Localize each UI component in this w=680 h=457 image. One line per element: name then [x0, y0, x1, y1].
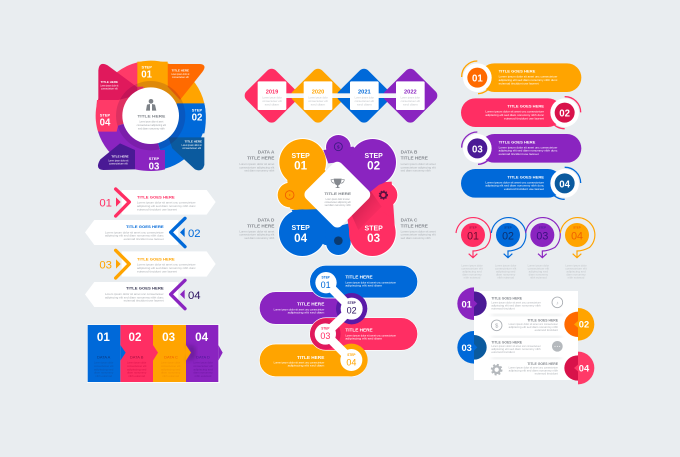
- bar 01: [462, 61, 581, 94]
- step 03 circle: nibh euismod: [530, 277, 548, 279]
- row 01: adipiscing elit sed diam nonummy nibh dunc: [137, 205, 197, 208]
- row 03: euismod tincidunt use laoreet: [137, 270, 177, 273]
- pill texts: TITLE HERE: [345, 328, 373, 333]
- column C: 03: [162, 331, 176, 344]
- row 02: 02: [188, 228, 201, 240]
- row 4 text: euismod tincidunt: [535, 373, 558, 376]
- label: data A: Lorem ipsum dolor sit amet: [239, 163, 275, 166]
- step 04 circle: STEP: [573, 226, 581, 230]
- arrow: dark purple: [98, 143, 135, 170]
- step 04 circle: adipiscing sed: [566, 271, 587, 273]
- diamond 2020: [289, 66, 347, 125]
- arrow: dark blue: [168, 137, 204, 170]
- card 2022: consectetuer elit: [401, 100, 420, 103]
- pill texts: Lorem ipsum dolor sit amet unc consectetuer: [274, 308, 325, 311]
- label: data B: TITLE HERE: [401, 156, 428, 161]
- column B: consectetuer elit: [127, 365, 147, 368]
- pill texts: adipiscing elit sed diam: [288, 365, 324, 368]
- label: data C: DATA C: [401, 218, 418, 223]
- icon: gear: [379, 191, 387, 199]
- bar 01: Lorem ipsum dolor sit amet unc consectetuer: [499, 76, 558, 79]
- row 2 text: TITLE GOES HERE: [527, 318, 559, 322]
- diamond 2019: [242, 66, 301, 125]
- label: data B: Lorem ipsum dolor sit amet: [401, 163, 436, 166]
- step 02 circle: diam nonummy: [496, 274, 516, 276]
- center circle: consectetuer adipiscing elit: [137, 124, 166, 127]
- arrow labels: consectetuer elit: [172, 76, 189, 79]
- row 2 text: [509, 318, 559, 332]
- panel: rounded bars with number badges: [461, 61, 581, 199]
- row 4 text: [509, 362, 559, 376]
- label: data D: TITLE HERE: [247, 224, 274, 229]
- step 03 block: 03: [149, 161, 160, 172]
- bar 02: 02: [559, 109, 570, 120]
- step 01 circle: [456, 218, 491, 279]
- step 04: [346, 353, 356, 367]
- row 02: Lorem ipsum dolor sit amet unc consectetuer: [105, 231, 164, 234]
- pill texts: adipiscing elit sed diam: [288, 311, 324, 314]
- step 02 circle: adipiscing sed: [496, 271, 516, 273]
- step 04 circle: diam nonummy: [566, 274, 587, 276]
- panel: four colored data columns: [87, 324, 223, 383]
- badge 04: 04: [579, 363, 590, 373]
- label: data C: TITLE HERE: [401, 224, 428, 229]
- bar 02: Lorem ipsum dolor sit amet unc consectetuer: [485, 111, 544, 114]
- badge 03: 03: [461, 343, 472, 353]
- arrow labels: TITLE HERE: [185, 140, 202, 143]
- row 4 text: adipiscing elit sed diam nonummy nibh: [509, 370, 559, 373]
- label: data B: [401, 150, 436, 173]
- label: data D: sed diam nonummy nibh: [244, 238, 275, 240]
- step labels: 01: [294, 160, 308, 173]
- row 4 text: Lorem ipsum dolor sit amet unc consectetuer: [509, 367, 558, 370]
- step 04 circle: nibh euismod: [568, 277, 585, 279]
- badge 01: 01: [461, 299, 472, 309]
- card 2019: 2019: [266, 89, 278, 95]
- column C: [153, 325, 195, 382]
- column D: 04: [195, 331, 209, 344]
- step 03: 03: [320, 331, 330, 341]
- step 02 circle: STEP: [504, 226, 512, 230]
- row 1 text: euismod tincidunt: [491, 307, 515, 310]
- card 2021: [350, 81, 379, 110]
- column B: DATA B: [130, 355, 144, 360]
- column B: [120, 325, 158, 382]
- step 02: 02: [347, 305, 357, 315]
- bar 03: euismod tincidunt use laoreet: [499, 153, 539, 156]
- column C: adipiscing sed: [161, 369, 181, 371]
- step labels: STEP: [365, 153, 383, 160]
- column A: consectetuer elit: [94, 365, 114, 368]
- label: data D: [239, 218, 275, 240]
- pill texts: Lorem ipsum dolor sit amet unc consectetuer: [345, 334, 396, 337]
- row 03: Lorem ipsum dolor sit amet unc consectetuer: [137, 264, 196, 267]
- column A: DATA A: [97, 355, 111, 360]
- row 1 text: TITLE GOES HERE: [491, 297, 523, 301]
- column B: 02: [129, 331, 142, 344]
- pill yellow: [259, 344, 367, 377]
- icon: music: ♪: [556, 300, 559, 306]
- row 2 text: Lorem ipsum dolor sit amet unc consectetuer: [509, 323, 558, 326]
- center diamond: [302, 159, 373, 230]
- row 04: 04: [188, 290, 201, 302]
- card 2020: consectetuer elit: [308, 100, 328, 103]
- orange circle: [279, 139, 326, 186]
- step 02 block: STEP: [192, 107, 203, 112]
- bar 04: euismod tincidunt use laoreet: [504, 188, 544, 191]
- step 02: STEP: [348, 301, 356, 305]
- bar 03: TITLE GOES HERE: [499, 139, 536, 144]
- card 2022: [396, 81, 425, 110]
- step 04 block: [96, 100, 122, 132]
- column A: [88, 325, 126, 382]
- step 03 block: STEP: [149, 156, 160, 161]
- arrow labels: Lorem ipsum dolor sit: [171, 73, 190, 76]
- step 03 circle: adipiscing sed: [529, 271, 549, 273]
- row 1 text: Lorem ipsum dolor sit amet unc consectetuer: [491, 301, 541, 304]
- bar 01: euismod tincidunt use laoreet: [499, 82, 539, 85]
- row 3 text: [491, 340, 542, 354]
- badge 02: 02: [579, 320, 589, 330]
- pill texts: TITLE HERE: [345, 275, 373, 280]
- column A: adipiscing sed: [94, 369, 114, 371]
- label: data C: Lorem ipsum dolor sit amet: [401, 230, 436, 233]
- step 02 circle: [491, 218, 526, 279]
- step labels: [292, 153, 383, 245]
- center diamond: consectetuer adipiscing elit: [325, 201, 351, 204]
- step 02 block: [177, 103, 206, 133]
- bar 02: [461, 97, 581, 129]
- ring: step 02: [336, 293, 367, 324]
- bar 01: TITLE GOES HERE: [499, 69, 536, 74]
- center circle: Lorem ipsum dolor sit amet: [139, 121, 164, 124]
- bar 04: Lorem ipsum dolor sit amet unc consectetuer: [485, 181, 544, 184]
- step 02 block: 02: [192, 112, 202, 123]
- row 02: [85, 218, 201, 247]
- step 01 circle: nibh euismod: [464, 277, 481, 279]
- bar 02: TITLE GOES HERE: [507, 104, 544, 109]
- column A: Lorem ipsum dolor: [94, 362, 114, 365]
- column D: diam nonummy: [193, 373, 214, 375]
- icon: chat: [552, 341, 563, 352]
- step 03 circle: Lorem ipsum dolor: [528, 264, 549, 267]
- step 01: [321, 276, 331, 290]
- column B: Lorem ipsum dolor: [127, 362, 147, 365]
- column B: adipiscing sed: [127, 369, 147, 371]
- row 03: 03: [99, 259, 112, 271]
- bar 04: [461, 167, 581, 199]
- step 02 circle: Lorem ipsum dolor: [495, 264, 517, 267]
- column C: Lorem ipsum dolor: [161, 362, 181, 365]
- pill texts: TITLE HERE: [297, 302, 324, 307]
- step 01 circle: consectetuer elit: [461, 267, 483, 270]
- arrow labels: TITLE HERE: [172, 69, 189, 72]
- panel: clover four steps: [239, 134, 436, 257]
- label: data D: Lorem ipsum dolor sit amet: [239, 230, 275, 233]
- purple shape: [323, 135, 396, 193]
- arrow labels: Lorem ipsum dolor sit: [182, 144, 202, 147]
- white connector: [315, 272, 363, 371]
- row 04: TITLE GOES HERE: [126, 287, 164, 291]
- step 04: 04: [346, 357, 356, 367]
- step 03: [320, 327, 330, 341]
- step 03 block: [135, 150, 165, 172]
- card 2020: sed diam: [311, 104, 325, 106]
- diamond 2022: [381, 66, 440, 125]
- center diamond: Lorem ipsum dolor sit amet: [326, 198, 350, 201]
- row 04: euismod tincidunt use laoreet: [124, 300, 164, 303]
- panel: timeline diamonds: [242, 66, 440, 125]
- step 01: STEP: [322, 276, 330, 280]
- icon: dollar: $: [337, 144, 340, 149]
- column A: diam nonummy: [94, 373, 114, 375]
- step 03 circle: consectetuer elit: [528, 267, 549, 270]
- step 03 circle: STEP: [539, 226, 546, 230]
- arrow labels: TITLE HERE: [111, 156, 129, 159]
- arrow: orange: [168, 64, 205, 100]
- row 3 text: Lorem ipsum dolor sit amet unc consectetuer: [491, 345, 541, 348]
- pill texts: [274, 275, 396, 368]
- card 2020: [304, 81, 332, 110]
- card 2021: Lorem ipsum dolor: [355, 97, 374, 100]
- step 02 circle: nibh euismod: [497, 277, 515, 279]
- label: data A: sed diam nonummy nibh: [244, 171, 275, 173]
- row 02: TITLE GOES HERE: [126, 225, 164, 229]
- step 01 block: 01: [141, 70, 153, 81]
- card 2019: Lorem ipsum dolor: [262, 97, 282, 100]
- step 03 circle: [526, 218, 560, 279]
- label: data C: sed diam nonummy nibh: [401, 238, 431, 240]
- card 2019: sed diam: [265, 104, 279, 106]
- center diamond: sed diam nonummy nibh: [325, 205, 351, 207]
- label: data A: DATA A: [258, 150, 275, 155]
- arrow labels: TITLE HERE: [101, 81, 118, 84]
- label: data B: sed diam nonummy nibh: [401, 171, 431, 173]
- panel: circular steps with down arrows: [456, 218, 595, 279]
- pill texts: Lorem ipsum dolor sit amet unc consectetuer: [345, 281, 396, 284]
- card 2021: 2021: [358, 89, 371, 95]
- row 01: 01: [99, 197, 112, 209]
- step 01 circle: adipiscing sed: [462, 271, 483, 273]
- label: data D: consectetuer adipiscing elit: [239, 234, 275, 237]
- icon: dollar: $: [495, 323, 499, 329]
- diamond 2021: [335, 66, 393, 125]
- step 01 circle: diam nonummy: [462, 274, 483, 276]
- row 03: TITLE GOES HERE: [137, 257, 175, 261]
- step 03 circle: diam nonummy: [529, 274, 549, 276]
- row 04: [85, 280, 201, 309]
- step labels: STEP: [292, 225, 310, 232]
- panel: white card list with half circles: [457, 287, 594, 384]
- arrow labels: [100, 69, 202, 165]
- column A: nibh euismod: [95, 376, 113, 378]
- step 04 circle: Lorem ipsum dolor: [565, 264, 587, 267]
- bar 04: TITLE GOES HERE: [507, 174, 544, 179]
- label: data B: DATA B: [401, 150, 418, 155]
- arrow labels: consectetuer elit: [101, 88, 118, 91]
- column B: diam nonummy: [127, 373, 147, 375]
- row 3 text: euismod tincidunt: [491, 351, 515, 354]
- column D: nibh euismod: [195, 376, 212, 378]
- card 2022: Lorem ipsum dolor: [401, 97, 420, 100]
- card 2022: 2022: [404, 89, 417, 95]
- label: data C: consectetuer adipiscing elit: [401, 234, 436, 237]
- row 2 text: adipiscing elit sed diam nonummy nibh: [509, 326, 559, 329]
- column D: Lorem ipsum dolor: [193, 362, 213, 365]
- row 3 text: TITLE GOES HERE: [491, 340, 523, 344]
- pill texts: adipiscing elit sed diam: [345, 337, 382, 340]
- bar 04: 04: [559, 179, 571, 190]
- pill purple: [259, 292, 367, 324]
- card 2020: Lorem ipsum dolor: [308, 97, 328, 100]
- row 3 text: adipiscing elit sed diam nonummy nibh: [491, 348, 542, 351]
- icon: target: [285, 191, 294, 199]
- label: data C: [401, 218, 436, 240]
- bar 04: adipiscing elit sed diam nonummy nibh dunc: [485, 185, 545, 188]
- arrow labels: consectetuer elit: [182, 147, 201, 150]
- step 04 circle: [560, 218, 595, 279]
- card 2020: 2020: [312, 89, 324, 95]
- card 2021: sed diam: [357, 104, 372, 106]
- column D: adipiscing sed: [193, 369, 214, 371]
- step 02 circle: consectetuer elit: [495, 267, 517, 270]
- step 01 circle: 01: [467, 230, 479, 242]
- step 01 circle: Lorem ipsum dolor: [461, 264, 483, 267]
- center circle: TITLE HERE: [137, 114, 166, 119]
- column D: [186, 325, 223, 382]
- row 04: adipiscing elit sed diam nonummy nibh dunc: [105, 296, 165, 299]
- card 2019: consectetuer elit: [262, 100, 282, 103]
- center circle: sed diam nonummy nibh: [138, 128, 165, 130]
- row 2 text: euismod tincidunt: [535, 329, 558, 332]
- label: data A: TITLE HERE: [247, 156, 274, 161]
- card 2021: consectetuer elit: [355, 100, 374, 103]
- blue shape: [279, 209, 351, 256]
- bar 01: adipiscing elit sed diam nonummy nibh dunc: [499, 79, 558, 82]
- bar 03: Lorem ipsum dolor sit amet unc consectetuer: [499, 146, 558, 149]
- label: data B: consectetuer adipiscing elit: [401, 166, 436, 169]
- step 02 circle: 02: [502, 230, 514, 242]
- card 2022: sed diam: [403, 104, 418, 106]
- panel: chevron list: [85, 189, 216, 309]
- step labels: STEP: [365, 225, 383, 232]
- icon: smile: [334, 236, 343, 245]
- step 03: STEP: [321, 327, 329, 331]
- bar 02: euismod tincidunt use laoreet: [504, 117, 544, 120]
- step 04 block: STEP: [100, 112, 111, 117]
- row 4 text: TITLE GOES HERE: [527, 362, 559, 366]
- row 03: [99, 250, 216, 278]
- panel: circular four step diagram: [96, 61, 206, 172]
- row 03: adipiscing elit sed diam nonummy nibh dunc: [137, 267, 197, 270]
- column C: nibh euismod: [162, 376, 180, 378]
- step 01 block: STEP: [141, 65, 152, 70]
- step labels: STEP: [292, 153, 310, 160]
- panel: linked step pills: [259, 265, 418, 377]
- arrow labels: consectetuer elit: [109, 162, 128, 165]
- column D: consectetuer elit: [193, 365, 213, 368]
- bar 03: 03: [472, 144, 483, 155]
- pink shape: [347, 182, 397, 256]
- step 02: [347, 301, 357, 315]
- column C: diam nonummy: [161, 373, 181, 375]
- step labels: 04: [294, 232, 308, 245]
- pill texts: adipiscing elit sed diam: [345, 284, 382, 287]
- bar 01: 01: [472, 74, 483, 85]
- label: data A: [239, 150, 275, 173]
- orange lobe: [278, 170, 338, 215]
- arrow labels: Lorem ipsum dolor sit: [108, 159, 129, 162]
- icon: dollar: [334, 143, 342, 151]
- column D: DATA D: [196, 355, 210, 360]
- bar 03: [462, 132, 581, 164]
- row 01: Lorem ipsum dolor sit amet unc consectetuer: [137, 202, 196, 205]
- bar 02: adipiscing elit sed diam nonummy nibh dunc: [485, 114, 545, 117]
- arrow labels: Lorem ipsum dolor sit: [100, 85, 119, 88]
- step 03 circle: 03: [536, 230, 548, 242]
- center diamond: TITLE HERE: [324, 191, 351, 196]
- pill texts: Lorem ipsum dolor sit amet unc consectetuer: [274, 362, 325, 365]
- pill blue: [310, 265, 418, 298]
- row 1 text: [491, 297, 542, 310]
- step 01: 01: [321, 280, 331, 290]
- step 01 circle: STEP: [469, 226, 477, 230]
- ring: step 03: [310, 319, 341, 349]
- column A: 01: [97, 331, 110, 344]
- row 1 text: adipiscing elit sed diam nonummy nibh: [491, 304, 542, 307]
- step 04: STEP: [347, 353, 355, 357]
- label: data A: consectetuer adipiscing elit: [239, 166, 275, 169]
- column C: DATA C: [164, 355, 178, 360]
- step 04 circle: 04: [571, 230, 583, 242]
- ring: step 04: [335, 344, 368, 376]
- center circle: [122, 87, 179, 144]
- row 04: Lorem ipsum dolor sit amet unc consectetuer: [105, 293, 164, 296]
- step labels: 03: [367, 232, 381, 245]
- step 04 circle: consectetuer elit: [565, 267, 587, 270]
- icon: gear: [492, 365, 502, 375]
- pill pink: [310, 318, 418, 350]
- bar 03: adipiscing elit sed diam nonummy nibh dunc: [499, 150, 558, 153]
- arrow: crimson: [98, 64, 137, 100]
- icon: person: [146, 99, 156, 111]
- row 02: euismod tincidunt use laoreet: [124, 238, 164, 241]
- card 2019: [258, 81, 286, 110]
- row 01: [99, 189, 216, 216]
- label: data D: DATA D: [258, 218, 275, 223]
- pill texts: TITLE HERE: [297, 355, 324, 360]
- column B: nibh euismod: [128, 376, 146, 378]
- step 04 block: 04: [100, 118, 111, 129]
- row 02: adipiscing elit sed diam nonummy nibh dunc: [105, 235, 165, 238]
- column C: consectetuer elit: [161, 365, 181, 368]
- row 01: euismod tincidunt use laoreet: [137, 208, 177, 211]
- step labels: 02: [367, 160, 381, 173]
- step 01 block: [137, 62, 168, 87]
- row 01: TITLE GOES HERE: [137, 195, 175, 199]
- icon: trophy: [331, 179, 344, 188]
